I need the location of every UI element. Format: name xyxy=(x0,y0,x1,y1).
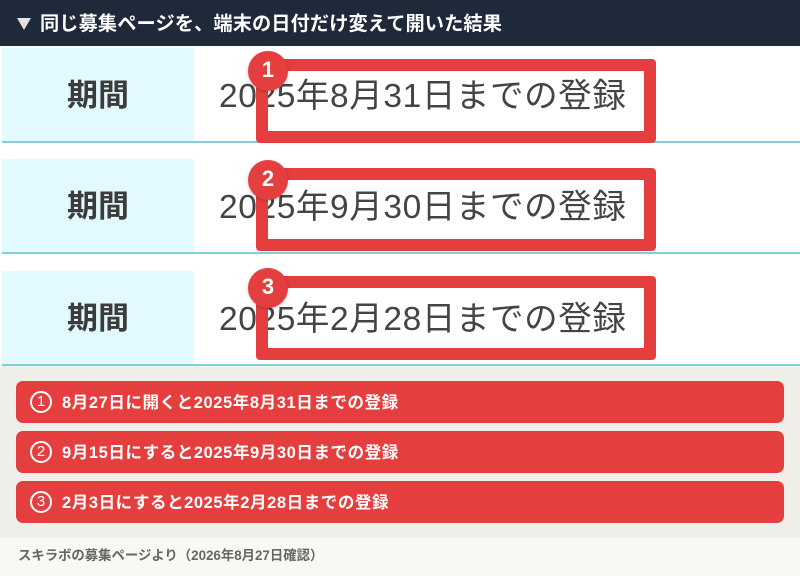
highlight box 1 xyxy=(256,59,656,143)
summary item 1: 8月27日に開くと2025年8月31日までの登録 xyxy=(62,394,399,412)
date text 3: 2025年2月28日までの登録 xyxy=(219,301,626,338)
label cell 1 xyxy=(2,48,194,141)
label cell 1: 期間 xyxy=(67,78,129,113)
label cell 2: 期間 xyxy=(67,189,129,224)
date text 2: 2025年9月30日までの登録 xyxy=(219,189,626,226)
summary item 1 xyxy=(16,381,784,423)
source note: スキラボの募集ページより（2026年8月27日確認） xyxy=(18,548,323,563)
icon: down triangle xyxy=(17,18,31,30)
header bar: 同じ募集ページを、端末の日付だけ変えて開いた結果 xyxy=(40,14,502,35)
panel: period row 2 xyxy=(2,159,800,254)
highlight box 2 xyxy=(256,168,656,251)
highlight box 3 xyxy=(256,276,656,360)
summary item 3: 2月3日にすると2025年2月28日までの登録 xyxy=(62,494,389,512)
summary item 2: 2 xyxy=(37,443,45,460)
panel: summary list xyxy=(0,366,800,538)
number badge 1 xyxy=(248,51,288,91)
panel: period row 1 xyxy=(2,48,800,143)
label cell 3: 期間 xyxy=(67,301,129,336)
panel: period row 3 xyxy=(2,268,800,366)
number badge 2: 2 xyxy=(262,166,274,191)
number badge 1: 1 xyxy=(262,57,274,82)
summary item 3 xyxy=(16,481,784,523)
summary item 1: 1 xyxy=(37,393,45,410)
source note xyxy=(0,538,800,576)
date text 1: 2025年8月31日までの登録 xyxy=(219,78,626,115)
label cell 3 xyxy=(2,271,194,364)
summary item 3: 3 xyxy=(37,493,45,510)
summary item 2: 9月15日にすると2025年9月30日までの登録 xyxy=(62,444,399,462)
label cell 2 xyxy=(2,159,194,252)
summary item 2 xyxy=(16,431,784,473)
number badge 2 xyxy=(248,160,288,200)
header bar xyxy=(0,0,800,46)
number badge 3: 3 xyxy=(262,274,274,299)
number badge 3 xyxy=(248,268,288,308)
